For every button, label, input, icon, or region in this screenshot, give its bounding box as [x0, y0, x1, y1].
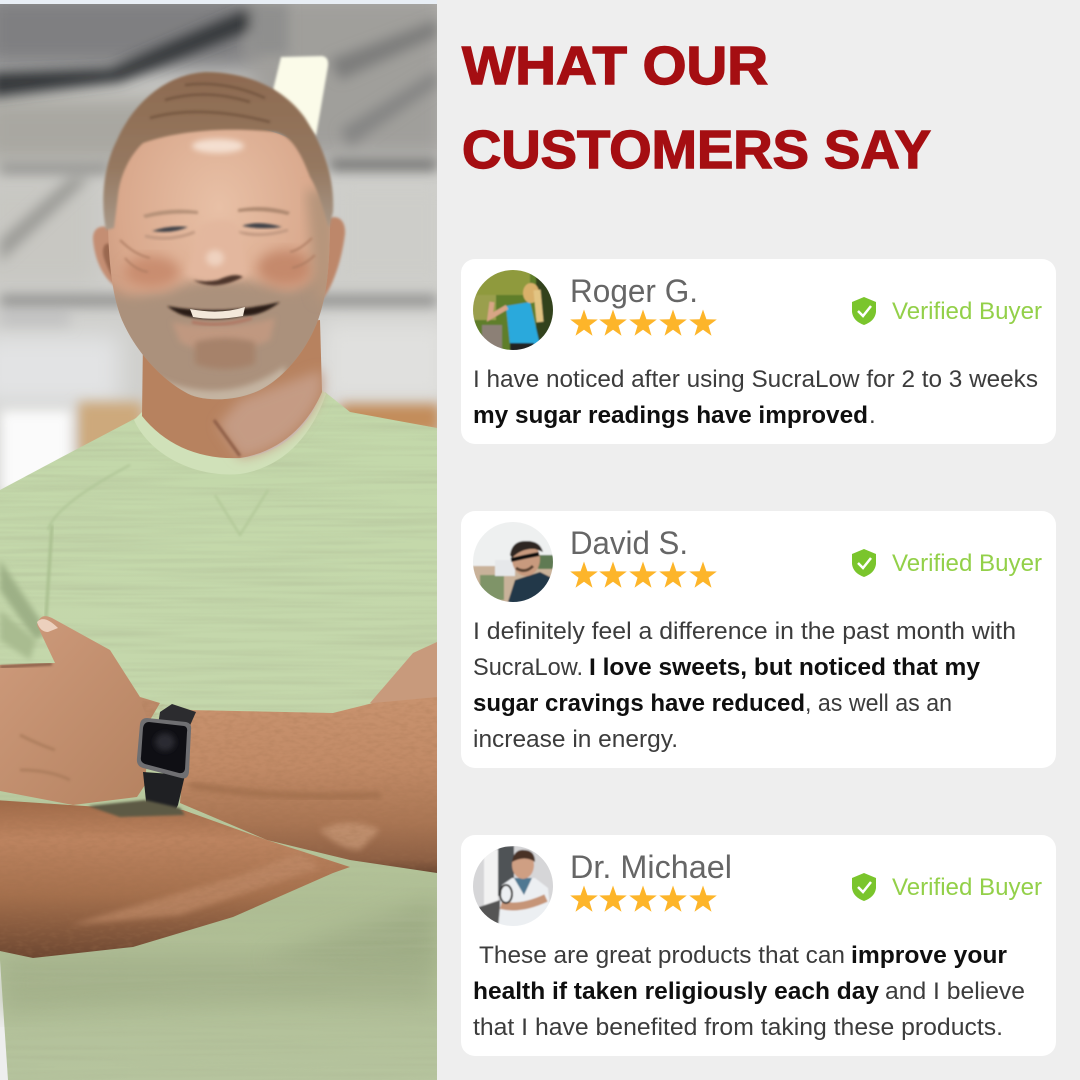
reviewer name: Dr. Michael — [570, 849, 732, 885]
review text: , as well as an — [805, 690, 952, 717]
shadow under arm — [88, 800, 185, 817]
title — [462, 36, 931, 180]
verified buyer badge: Verified Buyer — [892, 874, 1042, 901]
cheeks — [124, 256, 180, 288]
review text: improve your — [851, 942, 1007, 969]
review text: increase in energy. — [473, 726, 678, 753]
right hand fingers — [370, 642, 437, 704]
lower forearm — [0, 800, 350, 958]
smartwatch — [137, 704, 196, 811]
mouth and smile — [167, 302, 280, 319]
neck — [142, 320, 322, 458]
left hand and thumb — [0, 616, 160, 805]
review text: . — [869, 402, 876, 429]
star rating — [570, 562, 717, 588]
skin texture — [20, 704, 430, 952]
forehead highlight — [192, 139, 244, 153]
hair — [103, 72, 333, 230]
review text: I definitely feel a difference in the past month with — [473, 618, 1016, 645]
review text: health if taken religiously each day — [473, 978, 880, 1005]
panel: review card David S. — [461, 511, 1056, 768]
panel: review card Roger G. — [461, 259, 1056, 444]
review text: I love sweets, but noticed that my — [589, 654, 981, 681]
top sliver above photo — [0, 0, 437, 4]
review text: that I have benefited from taking these products. — [473, 1014, 1003, 1041]
title: CUSTOMERS SAY — [462, 120, 931, 180]
review text: SucraLow. — [473, 654, 583, 681]
head and face — [100, 72, 335, 420]
review text — [473, 942, 1025, 1041]
ceiling light — [273, 56, 328, 136]
avatar: doctor in white coat — [473, 846, 553, 926]
title: WHAT OUR — [462, 36, 768, 96]
upper forearm — [180, 697, 437, 873]
review text — [473, 618, 1016, 753]
blurred warehouse background — [0, 4, 437, 490]
review text — [473, 366, 1038, 429]
shirt — [0, 390, 437, 1080]
eyebrows — [143, 210, 198, 218]
eyes — [152, 226, 188, 232]
side shading — [302, 186, 330, 277]
avatar: woman in blue shirt — [473, 270, 553, 350]
wrinkles — [120, 238, 315, 272]
panel: photo of smiling man with crossed arms — [0, 0, 450, 1080]
star rating — [570, 310, 717, 336]
review text: sugar cravings have reduced — [473, 690, 805, 717]
star rating — [570, 886, 717, 912]
reviewer name: David S. — [570, 525, 688, 561]
ears — [93, 217, 345, 300]
stubble — [114, 276, 324, 392]
review text: These are great products that can — [479, 942, 845, 969]
verified buyer badge: Verified Buyer — [892, 298, 1042, 325]
verified buyer badge: Verified Buyer — [892, 550, 1042, 577]
review text: and I believe — [885, 978, 1025, 1005]
avatar: man with glasses — [473, 522, 553, 602]
nose — [189, 231, 246, 282]
review text: I have noticed after using SucraLow for 2 to 3 weeks — [473, 366, 1038, 393]
reviewer name: Roger G. — [570, 273, 698, 309]
panel: review card Dr. Michael — [461, 835, 1056, 1056]
review text: my sugar readings have improved — [473, 402, 868, 429]
